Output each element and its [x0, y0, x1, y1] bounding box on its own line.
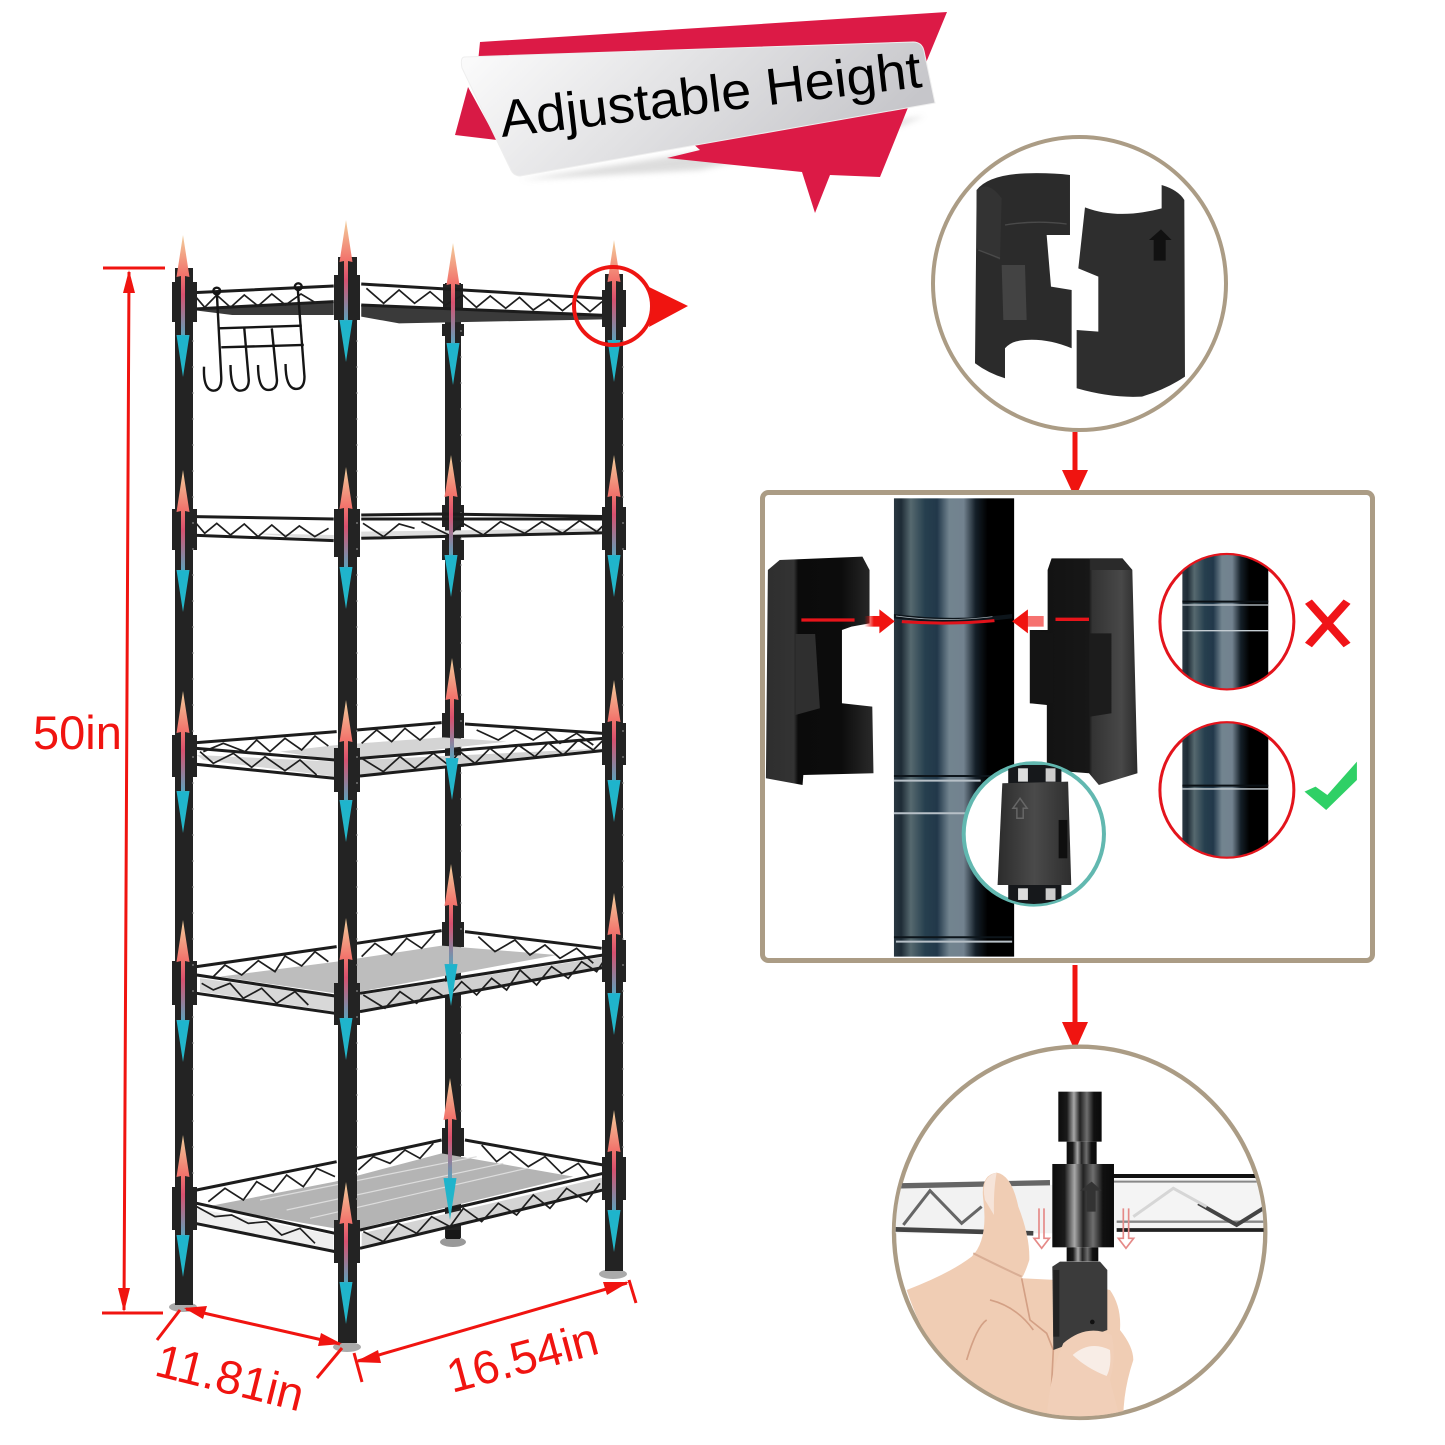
up arrow mark [1149, 229, 1172, 261]
arrow: pole to assembled view [1062, 965, 1088, 1051]
post and feet: front centre [333, 257, 361, 1352]
circle: fitting a shelf [893, 1047, 1265, 1418]
shelf 2 [188, 514, 611, 541]
shelf 3 [187, 723, 608, 778]
right clip [1030, 558, 1137, 785]
shelf 5 [195, 1140, 610, 1252]
shelf 1 with hook rack [188, 283, 611, 391]
shelf 4 [197, 931, 608, 1013]
back post [440, 283, 466, 1247]
title ribbon banner [455, 12, 947, 213]
post [1052, 1092, 1114, 1261]
title text: Adjustable Height [497, 41, 925, 149]
circle: clip halves [933, 137, 1226, 430]
dimension: height: 50in [33, 706, 122, 759]
dimension: height [33, 268, 165, 1313]
right clip half [1077, 185, 1185, 397]
post and feet: right [599, 274, 627, 1279]
left clip [766, 557, 873, 785]
right red arrow [1012, 609, 1044, 633]
post and feet: front left [169, 268, 197, 1312]
hook rack [204, 283, 304, 391]
adjustment arrows on posts [176, 220, 620, 1324]
arrow: clip to pole [1062, 432, 1088, 498]
mark: wrong [1308, 602, 1347, 645]
left clip half [975, 173, 1072, 378]
dimension: depth [151, 1306, 342, 1421]
panel: installation detail [762, 492, 1372, 960]
dimension: width: 16.54in [441, 1312, 604, 1403]
small down arrows [1034, 1208, 1134, 1248]
pole [894, 498, 1014, 957]
thumb [1047, 1331, 1120, 1418]
wire shelf [893, 1176, 1265, 1233]
lower sleeve [1052, 1262, 1107, 1350]
hand [907, 1173, 1133, 1418]
left red arrow [864, 609, 895, 633]
callout: red circle and pointer [574, 267, 688, 345]
dimension: width [354, 1280, 636, 1403]
lens: wrong seating [1160, 553, 1294, 690]
lens: correct seating [1160, 722, 1294, 858]
mark: correct [1305, 762, 1357, 810]
teal lens: assembled sleeve [964, 763, 1104, 905]
dimension: depth: 11.81in [151, 1333, 310, 1421]
